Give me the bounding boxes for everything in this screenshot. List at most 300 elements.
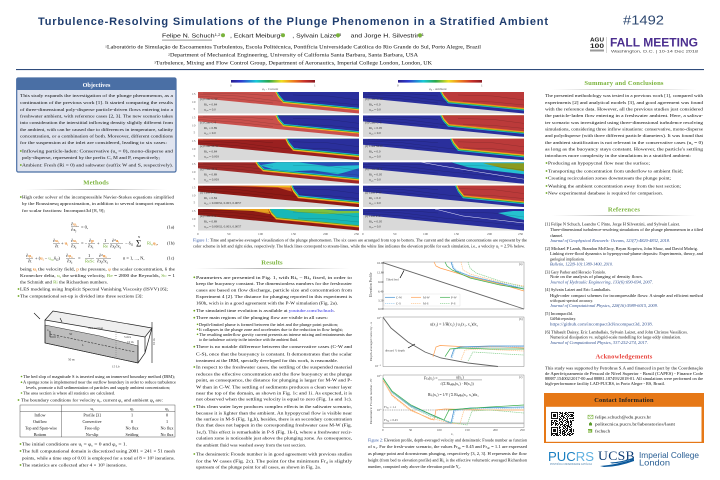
panel k: P-S current: u	[204, 224, 206, 228]
results text: cases are based on flow discharge, particle size and concentration from	[196, 288, 353, 294]
figure 2 caption: .	[460, 464, 461, 469]
x axis labels of figure 1: 0	[197, 232, 199, 236]
equations: ∂x	[115, 244, 121, 248]
heading: results: Results	[261, 260, 283, 266]
table: boundary conditions: Convective	[82, 419, 102, 424]
chart c: densimetric froude number: Fr	[384, 418, 387, 422]
panel k: P-S current: = 0.00032, 0.003, 0.0057	[208, 224, 242, 230]
equations: ,	[157, 241, 158, 247]
references list: Journal of Computational Physics, 228(16):5989-6015, 2009.	[550, 304, 658, 309]
x axis labels of figure 1: 150	[454, 232, 459, 236]
panel g: M-S current: = 0.89	[208, 173, 217, 177]
equation notes: the Schmidt and Ri the Richardson numbers.	[20, 280, 108, 284]
chart a: elevation profile: 12.80	[377, 270, 384, 274]
methods closing notes: c	[91, 443, 94, 447]
panel c: C-S current: = 0.89	[208, 126, 217, 130]
colorbar: ambient: a	[431, 89, 433, 92]
results text: treatment at the IBM, specially developed for this work, is reasonable.	[196, 358, 338, 364]
summary text: New experimental database is required for comparison.	[548, 190, 663, 196]
x axis labels of figure 1: 100	[258, 232, 263, 236]
colorbar: current: c	[264, 89, 266, 92]
chart c: densimetric froude number: Fr	[384, 405, 387, 409]
formula c	[424, 376, 482, 398]
figure 2 caption: = 0.45 and Fr	[461, 444, 488, 449]
panel h: M-S ambient: = 0.0	[373, 178, 381, 182]
panel b: C-W ambient: (b) Case C-W	[365, 97, 383, 101]
formula c: n	[461, 395, 463, 398]
figure 2 caption: Figure 2: Elevation profile, depth-averaged velocity and densimetric Froude number as function	[368, 438, 528, 444]
panel f: M-W ambient	[363, 138, 524, 160]
chart c: densimetric froude number: Densimetric Froude number - Fr	[369, 378, 373, 424]
panel e: M-W current: Ri	[204, 149, 207, 153]
panel k: P-S current: (k) Case P-S	[200, 214, 216, 218]
icon: web	[589, 422, 592, 426]
authors	[162, 33, 424, 40]
equations: s,n	[51, 258, 54, 262]
panel b: C-W ambient: Ri	[369, 102, 372, 106]
diagram: computational domain: 5 m/s	[124, 335, 132, 339]
figure 2 caption: = 1.1 are expressed	[490, 444, 528, 449]
results text: keep the buoyancy constant. The dimensionless numbers for the freshwater	[196, 281, 353, 286]
references list: [6] Thibault Dairay, Eric Lamballais, Sylvain Laizet, and John Christos Vassilicos.	[545, 330, 688, 336]
y axis labels for current panels: 15	[192, 209, 196, 213]
equations: δ	[54, 256, 56, 261]
table: boundary conditions: c	[133, 408, 135, 412]
figure 2 caption: number, computed only above the elevation profile Y	[368, 464, 464, 469]
panel e: M-W current: u	[204, 154, 206, 158]
equations: ∂t	[28, 258, 32, 264]
x axis labels of figure 1: 50	[227, 232, 231, 236]
panel l: P-S ambient: (l) Case P-S	[365, 214, 381, 218]
summary text: experiments [2] and analytical models [3], and good agreement was found	[545, 100, 704, 106]
y axis labels for current panels: 10	[192, 194, 196, 198]
objectives text: continuation of the previous work [1]. It started comparing the results	[20, 100, 173, 105]
panel a: C-W current: Ri	[204, 102, 207, 106]
chart b: depth averaged velocity: 10⁻¹	[375, 364, 381, 368]
table: boundary conditions: Outflow	[33, 419, 47, 424]
methods closing notes: The initial conditions are u	[22, 442, 70, 446]
panel j: P-W ambient: = 0.0	[373, 201, 381, 205]
equation notes: Kronecker delta, u	[20, 273, 59, 278]
panel f: M-W ambient: s,n	[371, 156, 374, 159]
objectives text: concentration, or a combination of both. Moreover, different conditions	[20, 134, 173, 140]
chart c: densimetric froude number: = 0.45	[389, 418, 398, 422]
panel d: C-S ambient: Ri	[369, 126, 372, 130]
table: boundary conditions: 1	[131, 412, 133, 418]
y axis labels for current panels: 10	[192, 217, 196, 221]
summary text: simulations, considering three inflow situations: conservative, mono-disperse	[545, 126, 703, 132]
panel j: P-W ambient	[363, 186, 524, 208]
colorbar: current: φ	[262, 87, 264, 91]
chart c: densimetric froude number: dc	[387, 407, 389, 410]
panel j: P-W ambient: a	[372, 198, 374, 201]
equations: j	[113, 245, 115, 249]
table: boundary conditions: i	[93, 408, 94, 412]
equations: Σ	[136, 238, 141, 248]
panel a: C-W current: (a) Case C-W	[200, 97, 218, 101]
equations: n = 1, ..., N,	[123, 256, 145, 262]
figure 1 caption	[193, 238, 527, 250]
equations: 1	[88, 253, 90, 258]
heading: methods: Methods	[83, 180, 109, 186]
formula c: (x₁) =	[429, 376, 438, 380]
equations: ReSc	[85, 258, 95, 264]
x axis labels of figure 1	[197, 232, 523, 236]
results text: The resulting underflow gravity current presents an intense mixing and entrainments due	[199, 333, 352, 337]
diagram: computational domain: 10 m	[127, 340, 134, 344]
objectives text: Inflowing particle-laden: Conservative (u	[22, 148, 97, 154]
setup notes: and ambient φ	[123, 398, 153, 402]
annotation: tilted bed: Tilted bed	[386, 278, 399, 282]
equations: n	[31, 255, 33, 259]
panel d: C-S ambient	[363, 115, 524, 137]
summary text: as long as the buoyancy stays constant. However, the particle's settling	[545, 146, 704, 152]
results text: culation zone is noticeable just above the plunging zone. As consequence,	[196, 436, 352, 442]
figure 2 caption: as plunge point and downstream plunging, respectively [3, 2, 3]. H represents the flow	[368, 451, 528, 457]
equations: i	[118, 240, 119, 244]
logo: PUCRS: PUCRS	[548, 449, 594, 464]
references list: Three-dimensional turbulence-resolving simulations of the plunge phenomenon in a tilted	[550, 228, 703, 232]
table: boundary conditions: u	[91, 406, 93, 411]
panel l: P-S ambient: Ri	[369, 220, 372, 224]
chart a: elevation profile: 3.20	[378, 298, 384, 302]
panel a: C-W current: c	[207, 104, 208, 107]
summary text: Creating recirculation zones downstream the plunge point;	[548, 176, 671, 180]
colorbar: current: 0	[230, 84, 232, 88]
diagram: computational domain: 50	[69, 332, 73, 336]
equations: ∂u	[71, 222, 76, 226]
panel c: C-S current	[198, 115, 359, 137]
y axis labels for current panels: 5	[194, 154, 196, 158]
panel g: M-S current: c	[207, 174, 208, 177]
panel h: M-S ambient: = 0.05	[373, 173, 382, 177]
equations: ∂x	[67, 258, 71, 264]
heading: acknowledgements: Acknowledgements	[596, 354, 653, 360]
logo: AGU Fall Meeting: 100	[590, 44, 605, 50]
table: boundary conditions: No-slip	[86, 432, 98, 437]
chart c: densimetric froude number: 0	[382, 428, 384, 432]
panel d: C-S ambient: = 0.05	[373, 126, 382, 130]
formula c: u(x₁)	[456, 376, 464, 380]
formula c: √(Σ Ri	[440, 382, 450, 386]
y axis labels for current panels: 5	[194, 130, 196, 134]
results text: Depth-limited plume is formed between the inlet and the plunge point position;	[199, 323, 338, 327]
chart c: densimetric froude number: 10⁰	[377, 408, 382, 412]
references list: Linking river-flood dynamics to hyperpycnal-plume deposits: Experiments, theory, and	[550, 252, 703, 257]
equations: j	[66, 242, 68, 246]
results text: the ambient fluid was washed away from the test section.	[196, 442, 306, 448]
chart a: elevation profile: Elevation Profile	[369, 272, 373, 297]
panel f: M-W ambient: a	[372, 151, 374, 154]
equation notes: p the pressure, φ the scalar concentration, δ the	[76, 266, 166, 272]
references list	[545, 222, 703, 346]
setup notes: The area section is where all statistics are calculated.	[23, 392, 115, 396]
objectives text: This study expands the investigation of the plunge phenomenon, as a	[20, 93, 173, 99]
affiliations	[105, 44, 482, 66]
objectives text: the ambient, with can be caused due to differences in temperature, salinity	[20, 127, 174, 133]
panel i: P-W current: = 0.84	[208, 196, 217, 200]
panel a: C-W current: u	[204, 108, 206, 112]
panel k: P-S current: = 0.89	[208, 220, 217, 224]
results text: the surface in M-S (Fig. 1g,h), besides, there is an secondary concentration	[196, 416, 353, 422]
panel i: P-W current: s,n	[206, 203, 209, 206]
formula c: n	[458, 395, 460, 398]
y axis labels for current panels: 10	[192, 170, 196, 174]
logo: PUCRS: PONTIFÍCIA UNIVERSIDADE CATÓLICA	[550, 461, 592, 466]
equations: i	[76, 240, 77, 244]
equations: i	[58, 240, 59, 244]
results text: 160h, wich is in a good agreement with the P-W simulation (Fig. 2a).	[196, 300, 338, 306]
results text: C-S), once that the buoyancy is constant. It demonstrates that the scalar	[196, 352, 353, 358]
figure 2 caption: c	[459, 466, 461, 470]
panel d: C-S ambient: (d) Case C-S	[365, 120, 382, 124]
results text: point, as consequence, the distance for plunging is larger for M-W and P-	[196, 378, 353, 384]
objectives text: = 0), mono-disperse and	[117, 148, 174, 154]
logo: AGU Fall Meeting	[590, 36, 698, 54]
summary text: ter scenario was investigated using three-dimensional turbulence resolving	[545, 120, 704, 125]
results text: Three main regions of the plunging flow are visible in all cases:	[196, 315, 328, 320]
equation notes: s	[60, 275, 62, 279]
table: boundary conditions: 0	[166, 412, 168, 418]
colorbar: ambient	[397, 80, 483, 92]
equations: n	[71, 255, 73, 259]
panel e: M-W current: = 0.003	[208, 154, 219, 158]
contact heading: Contact Information	[594, 397, 654, 404]
summary text: = 0)	[693, 140, 704, 145]
chart b: depth averaged velocity: (b)	[519, 317, 523, 321]
equations: ∂t	[55, 244, 59, 248]
colorbar: ambient: - Ambient	[432, 87, 447, 91]
affiliations: 3	[154, 60, 157, 64]
linkedin handle: fschuch	[595, 428, 611, 434]
panel k: P-S current: Ri	[204, 220, 207, 224]
summary text: and polydisperse (with three different particle diameters). It was found that	[545, 133, 704, 138]
equations: ∂x	[110, 244, 114, 248]
diagram: computational domain: 50 m	[68, 358, 75, 362]
results text: is slightly	[328, 458, 353, 464]
equation notes: the velocity field,	[37, 266, 76, 272]
figure 2 caption: dc	[487, 446, 491, 450]
website: politecnica.pucrs.br/laboratorios/lasnt	[595, 422, 676, 426]
icon: QR code	[551, 412, 574, 436]
equations: j	[100, 260, 102, 264]
panel h: M-S ambient: a	[372, 174, 374, 177]
table: boundary conditions: Profile [3]	[83, 412, 101, 418]
formula c: d	[427, 378, 429, 381]
equations: + u	[61, 241, 67, 246]
references list: [4] Sylvain Laizet and Eric Lamballais.	[545, 288, 611, 292]
panel f: M-W ambient: (f) Case M-W	[365, 144, 383, 148]
equations: 1	[104, 238, 106, 243]
objectives text: Ambient: Fresh (Ri = 0) and saltwater (suffix W and S, respectively).	[22, 162, 173, 168]
table: boundary conditions: 0	[131, 419, 133, 424]
affiliations: 2	[168, 52, 171, 56]
results text	[193, 275, 353, 470]
acknowledgements text: de Aperfeiçoamento de Pessoal de Nível Superior - Brasil (CAPES) - Finance Code	[545, 371, 703, 376]
panel b: C-W ambient: u	[369, 108, 371, 112]
equations: ∂x	[97, 258, 101, 264]
panel l: P-S ambient: = 0.05	[373, 220, 382, 224]
equations: ∂²u	[112, 238, 118, 243]
panel i: P-W current: (i) Case P-W	[200, 191, 217, 195]
formula c: c	[432, 395, 434, 398]
results text: There is no notable difference between the conservative cases (C-W and	[196, 344, 353, 349]
legend	[384, 294, 460, 306]
equations: = −	[81, 241, 88, 246]
legend: M-S	[423, 302, 429, 306]
diagram: computational domain: 15 Lb	[112, 364, 120, 368]
panel b: C-W ambient	[363, 92, 524, 114]
results text: near the top of the domain, as shown in Fig. 1c and 1i. As expected, it is	[196, 390, 352, 396]
equations: ∂²φ	[99, 253, 105, 258]
panel f: M-W ambient: u	[369, 154, 371, 158]
logo: UCSB: UCSB	[598, 448, 635, 463]
panel g: M-S current: = 0.003	[208, 178, 219, 182]
results text: The simulated time evolution is available at youtube.com/fschuch .	[196, 308, 335, 313]
chart b: depth averaged velocity: Depth-averaged velocity - u	[369, 322, 373, 361]
table: boundary conditions: No flux	[161, 432, 174, 437]
x axis labels of figure 1: 50	[393, 232, 397, 236]
methods closing notes: = 1.	[117, 442, 127, 446]
chart a: elevation profile: 16.00	[377, 261, 384, 265]
colorbar: current: 1	[314, 84, 316, 88]
formula b: u(x₁) = 1/H(x₁) ∫ u₁(x₁, x₂)dx₂	[430, 322, 479, 328]
objectives text: into consideration the interstitial inflowing density slightly different from	[20, 120, 174, 125]
logo: Imperial College London: Imperial College	[639, 451, 699, 460]
methods closing notes: = 0 and φ	[93, 442, 116, 446]
logo: Imperial College London: London	[639, 458, 670, 468]
equations: j	[74, 229, 76, 233]
y axis labels for current panels: 5	[194, 107, 196, 111]
formula c: (x₁, x₂)dx₂	[463, 393, 479, 398]
equation notes: LES modeling using Implicit Spectral Vanishing Viscosity (ISVV) [6];	[20, 286, 168, 292]
equations: Re	[103, 244, 108, 248]
logo: AGU Fall Meeting: AGU	[590, 38, 604, 44]
authors: 2	[280, 33, 283, 37]
annotation: depth: discard ½ depth	[385, 348, 405, 352]
objectives text	[20, 93, 174, 168]
icon: linkedin: in	[588, 429, 591, 433]
panel e: M-W current: (e) Case M-W	[200, 144, 218, 148]
figure 2 caption: c	[444, 459, 445, 463]
results text: to the turbulence activity in the interface with the ambient fluid.	[199, 338, 298, 342]
methods text: by the Boussinesq approximation, in addition to several transport equations	[22, 201, 174, 207]
setup notes: are:	[154, 398, 163, 402]
panel c: C-S current: u	[204, 131, 206, 135]
results text: because it is lighter than the ambient. An hypopycnal flow is visible near	[196, 410, 353, 416]
formula c: n	[450, 384, 452, 387]
authors: 1,2	[215, 33, 221, 37]
panel l: P-S ambient	[363, 209, 524, 230]
panel e: M-W current: c	[207, 151, 208, 154]
methods closing notes	[20, 442, 176, 468]
references list: https://github.com/incompact3d/incompact3d, 2018.	[550, 322, 653, 328]
equations: (1b)	[167, 241, 175, 246]
table: boundary conditions: Inflow	[34, 412, 46, 418]
table: boundary conditions	[20, 405, 175, 437]
equations: =	[78, 256, 81, 261]
equations: ∂φ	[66, 253, 71, 258]
equations: ∂x	[71, 244, 75, 248]
y axis labels for current panels: 15	[192, 186, 196, 190]
formula c: φ	[451, 382, 454, 386]
chart a: elevation profile: 9.60	[378, 280, 384, 284]
acknowledgements text: 88887.154002/2017-00 and 88881.187493/2018-01. All simulations were performed on the	[545, 376, 703, 381]
methods closing notes: = φ	[82, 442, 92, 446]
panel j: P-W ambient: Ri	[369, 196, 372, 200]
results text: The densimetric Froude number is in good agreement with previous studies	[196, 452, 352, 456]
objectives text: poly-disperse, represented by the prefix C, M and P, respectively;	[22, 155, 160, 161]
table: boundary conditions: φ	[165, 406, 168, 411]
summary text	[545, 93, 704, 196]
affiliations: Laboratório de Simulação de Escoamentos Turbulentos, Escola Politécnica, Pontifícia Universidade Católica do Rio Grande do Sul, Porto Alegre, Brazil	[107, 46, 482, 50]
x axis labels of figure 1: 150	[291, 232, 296, 236]
panel i: P-W current: Ri	[204, 196, 207, 200]
results text: flux that does not happen in the corresponding freshwater case M-W (Fig.	[196, 422, 352, 428]
setup notes: A sponge zone is implemented near the outflow boundary in order to reduce turbulence	[23, 381, 176, 385]
references list: High-order compact schemes for incompressible flows: A simple and efficient method	[550, 294, 703, 298]
table: boundary conditions: Free-slip	[85, 426, 99, 430]
references list: with quasi-spectral accuracy.	[550, 299, 593, 303]
references list: Numerical dissipation vs. subgrid-scale modelling for large eddy simulation.	[550, 336, 681, 340]
diagram: computational domain: 10 m	[152, 338, 156, 345]
diagram: computational domain: L	[82, 343, 84, 347]
panel i: P-W current: c	[207, 198, 208, 201]
chart c: densimetric froude number: 50	[409, 428, 413, 432]
references list: Journal of Computational Physics, 337:252-274, 2017.	[550, 341, 648, 346]
figure 2 caption: is the effective volumetric averaged Richardson	[445, 458, 528, 462]
diagram: computational domain	[34, 311, 156, 368]
objectives text: of three-dimensional poly-disperse particle-driven flows entering into a	[20, 107, 173, 112]
y axis labels for current panels: 5	[194, 224, 196, 228]
table: boundary conditions: No flux	[161, 426, 174, 430]
icon: linkedin	[588, 429, 592, 433]
results text: fixed, in order to	[311, 275, 353, 281]
summary text: Transporting the concentration from underflow to ambient fluid;	[548, 168, 683, 174]
table: boundary conditions: Bottom	[34, 432, 47, 437]
table: boundary conditions: φ	[130, 406, 133, 411]
heading: references: References	[608, 206, 640, 214]
panel c: C-S current: s,n	[206, 133, 209, 136]
panel a: C-W current: s,n	[206, 109, 209, 112]
chart c: densimetric froude number: 100	[437, 428, 442, 432]
summary text: introduces more complexity in the simulations in a stratified ambient:	[545, 153, 691, 158]
references list: [2] Michael P Lamb, Brandon McElroy, Bryan Kopriva, John Shaw, and David Mohrig.	[545, 247, 698, 252]
equations: j	[42, 258, 44, 262]
equations: j	[119, 245, 121, 249]
diagram: computational domain: x₁	[57, 335, 60, 339]
authors: , Sylvain Laizet	[283, 34, 339, 40]
logo: AGU Fall Meeting: Washington, D.C. | 10-14 Dec 2018	[611, 49, 698, 54]
table: boundary conditions: 1	[166, 419, 168, 424]
chart c: densimetric froude number: (c)	[519, 375, 522, 379]
y axis labels for current panels: 15	[192, 139, 196, 143]
panel g: M-S current: (g) Case M-S	[200, 167, 217, 171]
acknowledgements text: This study was supported by Petrobras S.A and financed in part by the Coordenação	[545, 366, 703, 370]
references list: Journal of Geophysical Research: Oceans, 123(7):4820-4832, 2018.	[550, 239, 670, 244]
panel f: M-W ambient: = 0.0	[373, 149, 381, 153]
references list: [3] Gary Parker and Horacio Toniolo.	[545, 270, 606, 274]
methods text	[20, 194, 175, 214]
panel k: P-S current	[198, 209, 359, 230]
results text: upstream of the plunge point for all cases, as shown in Fig. 2a.	[196, 464, 321, 470]
panel h: M-S ambient: s,n	[371, 179, 374, 182]
equations	[26, 222, 175, 264]
y axis labels for current panels: 10	[192, 123, 196, 127]
panel g: M-S current: s,n	[206, 179, 209, 182]
panel l: P-S ambient: s,n	[371, 226, 374, 229]
email address: felipe.schuch@edu.pucrs.br	[595, 414, 651, 420]
